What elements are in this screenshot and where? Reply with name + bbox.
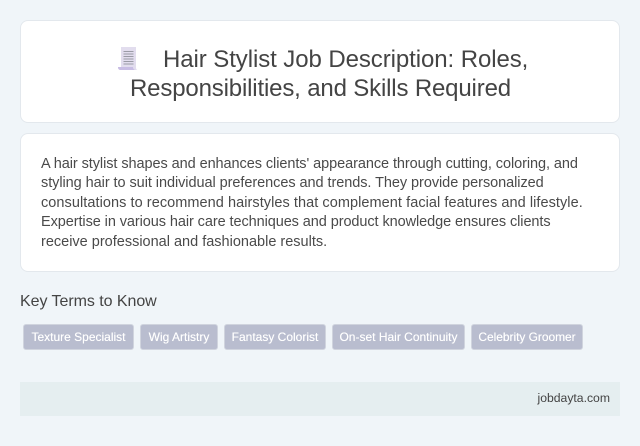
text block: description	[41, 156, 583, 250]
tag: Celebrity Groomer: Celebrity Groomer	[478, 330, 576, 344]
tag: Wig Artistry	[140, 324, 218, 350]
text block: description: A hair stylist shapes and enhances clients' appearance through cutting, coloring, and	[41, 156, 578, 172]
icon: document scroll	[118, 47, 137, 70]
panel: description card	[20, 133, 620, 272]
tag list	[23, 324, 583, 350]
tag: Celebrity Groomer	[471, 324, 583, 350]
footer bar	[20, 382, 620, 416]
title: Responsibilities, and Skills Required	[130, 75, 511, 102]
tag: Texture Specialist	[23, 324, 134, 350]
tag: On-set Hair Continuity	[332, 324, 465, 350]
heading: key terms: Key Terms to Know	[20, 293, 157, 310]
tag: Wig Artistry: Wig Artistry	[149, 330, 209, 344]
title	[130, 46, 528, 102]
text block: description: styling hair to suit individual preferences and trends. They provide personalized	[41, 175, 544, 191]
tag: On-set Hair Continuity: On-set Hair Continuity	[339, 330, 458, 344]
tag: Fantasy Colorist: Fantasy Colorist	[232, 330, 318, 344]
tag: Texture Specialist: Texture Specialist	[31, 330, 126, 344]
title: Hair Stylist Job Description: Roles,	[163, 46, 528, 73]
footer source text: jobdayta.com	[538, 391, 610, 405]
text block: description: receive professional and fashionable results.	[41, 234, 327, 250]
panel: title card	[20, 20, 620, 123]
text block: description: consultations to recommend hairstyles that complement facial features and lifestyle.	[41, 195, 583, 211]
text block: description: Expertise in various hair care techniques and product knowledge ensures clients	[41, 214, 551, 230]
tag: Fantasy Colorist	[224, 324, 326, 350]
